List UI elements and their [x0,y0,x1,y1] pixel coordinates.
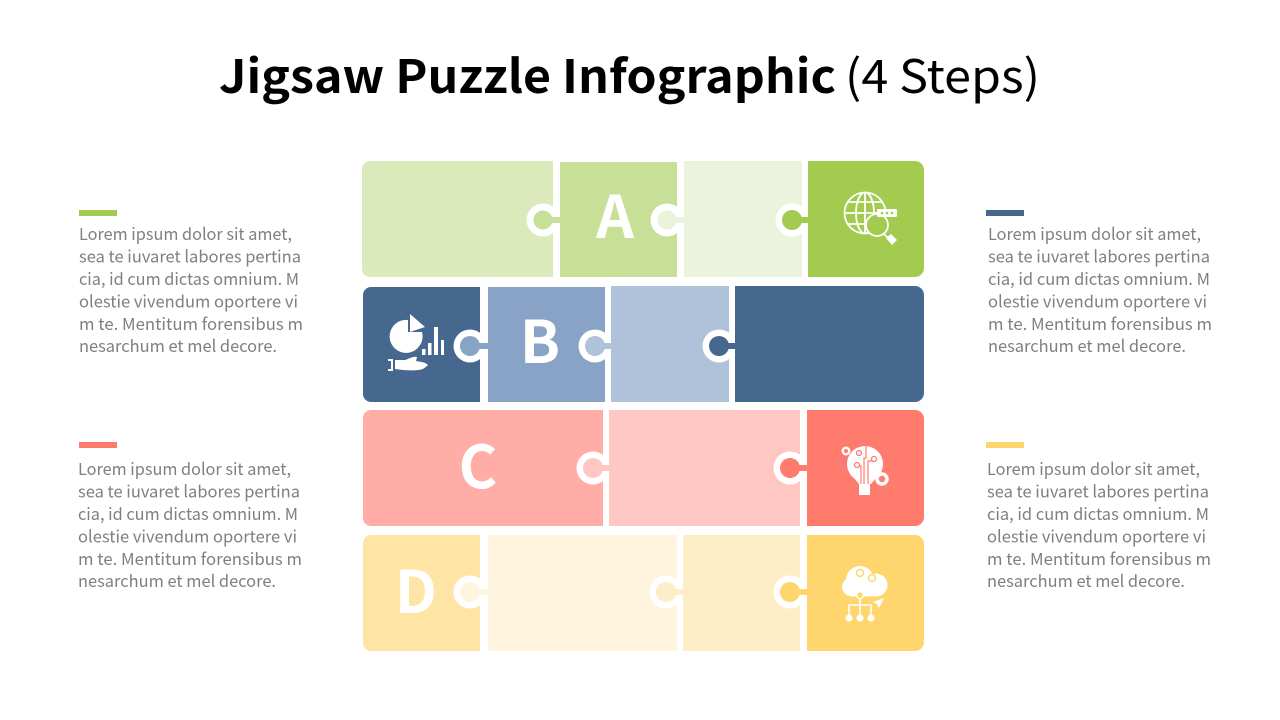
title: Jigsaw Puzzle Infographic [219,41,836,107]
icon: pie chart and hand [388,314,444,371]
connector knobs B [454,330,736,362]
panel: right text B: nesarchum et mel decore. [988,333,1186,357]
panel: left text A: sea te iuvaret labores pertina [79,244,301,268]
panel: right text D: cia, id cum dictas omnium. M [987,501,1209,525]
panel: left text A: olestie vivendum oportere vi [79,288,298,312]
panel: right text D: sea te iuvaret labores pertina [987,478,1209,502]
panel: right text D: olestie vivendum oportere vi [987,524,1206,548]
panel: right text D: nesarchum et mel decore. [987,568,1185,592]
connector knobs D [454,576,808,608]
panel: left text C: olestie vivendum oportere vi [78,524,297,548]
panel: left text C: Lorem ipsum dolor sit amet, [78,456,291,480]
panel: left text A: m te. Mentitum forensibus m [79,311,303,335]
letter D: D [395,545,437,630]
panel: right text D: Lorem ipsum dolor sit amet, [987,456,1200,480]
title: (4 Steps) [845,41,1040,107]
panel: right text D [986,442,1211,592]
panel: left text C: m te. Mentitum forensibus m [78,546,302,570]
letter A: A [595,170,635,255]
panel: right text B: cia, id cum dictas omnium. M [988,266,1210,290]
panel: right text B: olestie vivendum oportere vi [988,288,1207,312]
panel: left text A: Lorem ipsum dolor sit amet, [79,221,292,245]
icon: globe search [844,192,897,245]
panel: puzzle row B [363,286,924,402]
panel: puzzle row D [363,535,924,651]
panel: left text A [79,210,303,357]
panel: left text C: sea te iuvaret labores pertina [78,478,300,502]
panel: puzzle row C [363,410,924,526]
icon: cloud network [842,566,888,622]
letter B: B [520,295,560,380]
icon: light bulb with gears [834,446,887,495]
connector knobs C [576,452,808,484]
panel: left text C [78,442,302,592]
panel: right text D: m te. Mentitum forensibus m [987,546,1211,570]
panel: right text B [986,210,1212,357]
panel: left text A: nesarchum et mel decore. [79,333,277,357]
letter C: C [459,420,497,505]
panel: left text A: cia, id cum dictas omnium. M [79,266,299,290]
panel: puzzle row A [362,161,924,277]
panel: left text C: cia, id cum dictas omnium. M [78,501,298,525]
panel: left text C: nesarchum et mel decore. [78,568,276,592]
panel: right text B: sea te iuvaret labores pertina [988,244,1210,268]
panel: right text B: m te. Mentitum forensibus m [988,311,1212,335]
panel: right text B: Lorem ipsum dolor sit amet, [988,221,1201,245]
connector knobs A [526,204,809,236]
